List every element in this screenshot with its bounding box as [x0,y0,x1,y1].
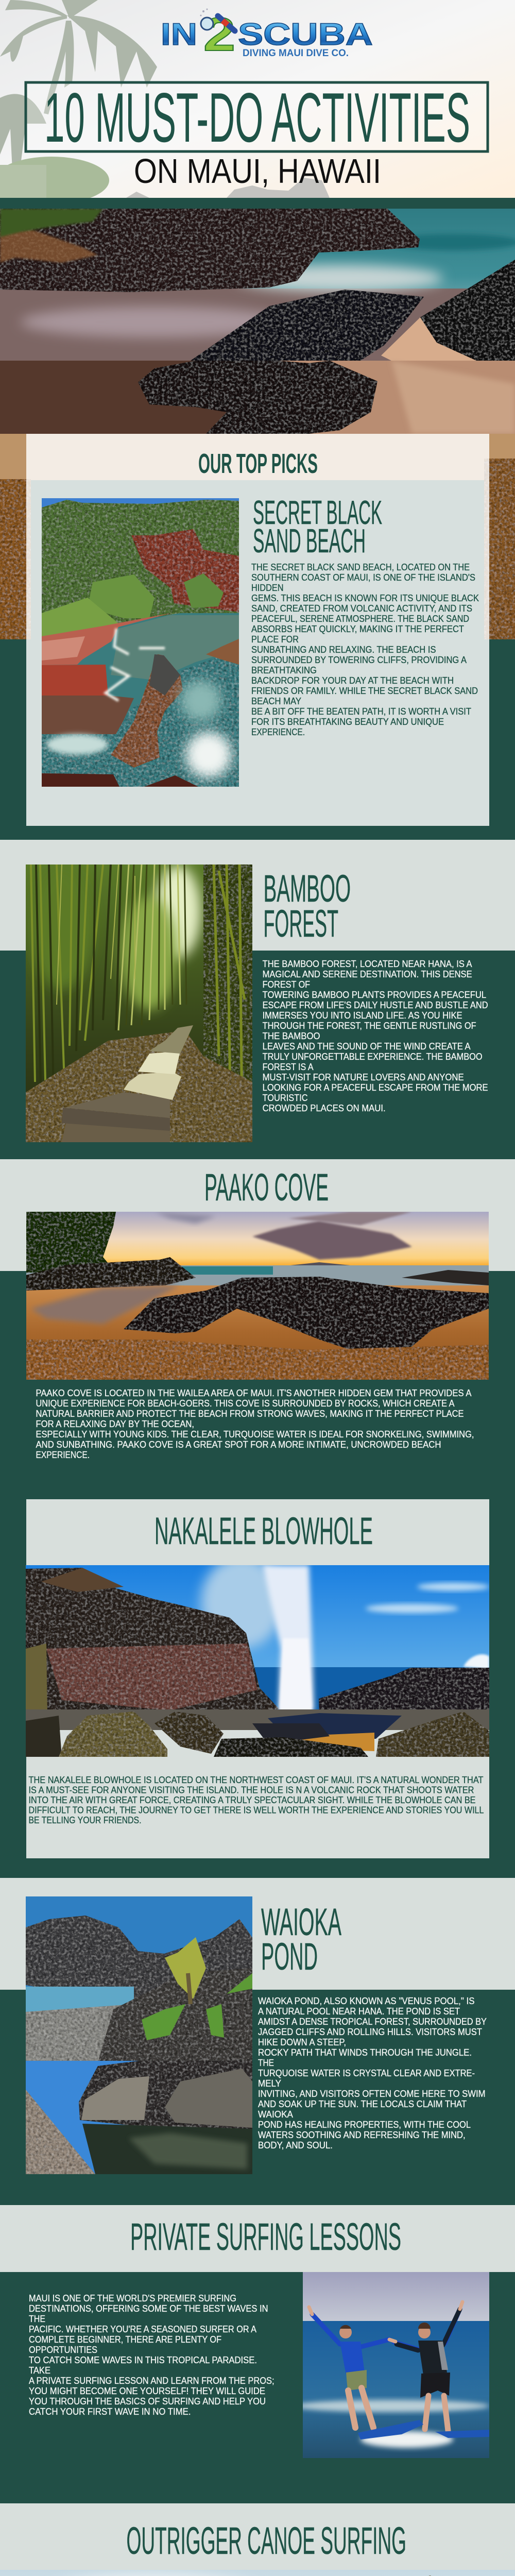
text: waioka pond description: HIKE DOWN A STEEP, [258,2037,346,2047]
heading: secret black sand beach: SECRET BLACK [253,494,382,531]
text: bamboo forest description: TOURISTIC [263,1093,308,1103]
text: bamboo forest description: TRULY UNFORGETTABLE EXPERIENCE. THE BAMBOO [263,1052,483,1062]
text: waioka pond description: ROCKY PATH THAT WINDS THROUGH THE JUNGLE. [258,2047,472,2058]
text: waioka pond description: JAGGED CLIFFS AND ROLLING HILLS. VISITORS MUST [258,2027,482,2037]
heading: bamboo forest: FOREST [264,902,338,945]
photo: nakalele blowhole [26,1556,489,1757]
text: private surfing lessons description: THE [29,2314,45,2324]
text: waioka pond description [258,1996,487,2150]
text: secret black sand beach description: SAND, CREATED FROM VOLCANIC ACTIVITY, AND ITS [251,603,472,614]
text: nakalele blowhole description: IS A MUST-SEE FOR ANYONE VISITING THE ISLAND. THE HOLE IS N A VOLCANIC ROCK THAT SHOOTS WATER [29,1785,474,1795]
text: bamboo forest description: THROUGH THE FOREST, THE GENTLE RUSTLING OF [263,1021,476,1031]
text: private surfing lessons description: YOU MIGHT BECOME ONE YOURSELF! THEY WILL GUIDE [29,2386,265,2396]
text: private surfing lessons description: TAKE [29,2365,50,2376]
photo: red sand beach [42,498,239,787]
heading: our top picks: OUR TOP PICKS [198,448,318,479]
section: outrigger canoe surfing [0,2503,515,2576]
text: secret black sand beach description: FOR ITS BREATHTAKING BEAUTY AND UNIQUE [251,717,444,727]
text: secret black sand beach description: GEMS. THIS BEACH IS KNOWN FOR ITS UNIQUE BLACK [251,593,479,603]
heading: bamboo forest [264,867,351,945]
text: waioka pond description: WAIOKA [258,2109,293,2120]
text: secret black sand beach description: THE SECRET BLACK SAND BEACH, LOCATED ON THE [251,562,470,572]
text: secret black sand beach description: PLACE FOR [251,634,299,645]
text: secret black sand beach description: SURROUNDED BY TOWERING CLIFFS, PROVIDING A [251,655,467,665]
text: bamboo forest description: FOREST IS A [263,1062,314,1072]
hero: green divider band [0,198,515,209]
text: waioka pond description: THE [258,2058,274,2068]
photo: outrigger canoe [0,2570,515,2576]
logo: In2Scuba: 2 [203,8,235,61]
text: paako cove description: EXPERIENCE. [36,1450,90,1460]
text: secret black sand beach description [251,562,479,737]
text: paako cove description: ESPECIALLY WITH YOUNG KIDS. THE CLEAR, TURQUOISE WATER IS IDEAL FOR SNORKELING, SWIMMING, [36,1429,474,1439]
text: bamboo forest description: MAGICAL AND SERENE DESTINATION. THIS DENSE [263,969,472,979]
text: bamboo forest description: MUST-VISIT FOR NATURE LOVERS AND ANYONE [263,1072,464,1082]
text: bamboo forest description: THE BAMBOO [263,1031,320,1041]
text: nakalele blowhole description [29,1775,484,1825]
text: secret black sand beach description: BEACH MAY [251,696,301,706]
text: waioka pond description: AND SOAK UP THE SUN. THE LOCALS CLAIM THAT [258,2099,467,2109]
photo: surfers [294,2272,489,2458]
text: private surfing lessons description: COMPLETE BEGINNER, THERE ARE PLENTY OF [29,2334,221,2345]
heading: bamboo forest: BAMBOO [264,867,351,910]
text: nakalele blowhole description: BE TELLING YOUR FRIENDS. [29,1815,141,1825]
text: bamboo forest description: LEAVES AND THE SOUND OF THE WIND CREATE A [263,1041,471,1052]
text: waioka pond description: A NATURAL POOL NEAR HANA. THE POND IS SET [258,2006,460,2016]
text: secret black sand beach description: BE A BIT OFF THE BEATEN PATH, IT IS WORTH A VISIT [251,706,471,717]
logo: In2Scuba: IN [161,17,197,52]
text: bamboo forest description [263,959,488,1113]
text: private surfing lessons description [29,2293,274,2417]
heading: waioka pond: WAIOKA [261,1901,341,1943]
subtitle: ON MAUI, HAWAII [134,152,381,191]
text: private surfing lessons description: YOU THROUGH THE BASICS OF SURFING AND HELP YOU [29,2396,266,2406]
text: waioka pond description: BODY, AND SOUL. [258,2140,333,2150]
text: waioka pond description: WATERS SOOTHING AND REFRESHING THE MIND, [258,2130,466,2140]
section: paako cove [0,1159,515,1460]
text: paako cove description: NATURAL BARRIER AND PROTECT THE BEACH FROM STRONG WAVES, MAKING IT THE PERFECT PLACE [36,1409,464,1419]
text: waioka pond description: TURQUOISE WATER IS CRYSTAL CLEAR AND EXTRE- [258,2068,475,2078]
text: secret black sand beach description: HIDDEN [251,583,283,593]
heading: waioka pond: POND [261,1935,318,1978]
text: bamboo forest description: LOOKING FOR A PEACEFUL ESCAPE FROM THE MORE [263,1082,488,1093]
text: bamboo forest description: CROWDED PLACES ON MAUI. [263,1103,386,1113]
heading: secret black sand beach: SAND BEACH [253,522,366,560]
text: private surfing lessons description: DESTINATIONS, OFFERING SOME OF THE BEST WAVES IN [29,2303,268,2314]
text: paako cove description [36,1388,474,1460]
photo: bamboo forest [26,865,252,1142]
text: private surfing lessons description: OPPORTUNITIES [29,2345,97,2355]
heading: waioka pond [261,1901,341,1978]
text: waioka pond description: INVITING, AND VISITORS OFTEN COME HERE TO SWIM [258,2089,485,2099]
text: private surfing lessons description: PACIFIC. WHETHER YOU'RE A SEASONED SURFER OR A [29,2324,256,2334]
section: private surfing lessons [0,2205,515,2458]
text: waioka pond description: AMIDST A DENSE TROPICAL FOREST, SURROUNDED BY [258,2016,487,2027]
heading: paako cove: PAAKO COVE [204,1166,329,1209]
text: bamboo forest description: FOREST OF [263,979,310,990]
text: secret black sand beach description: EXPERIENCE. [251,727,305,737]
heading: secret black sand beach [253,494,382,560]
text: waioka pond description: MELY [258,2078,281,2089]
text: secret black sand beach description: BACKDROP FOR YOUR DAY AT THE BEACH WITH [251,675,454,686]
text: nakalele blowhole description: THE NAKALELE BLOWHOLE IS LOCATED ON THE NORTHWEST COAST OF MAUI. IT'S A NATURAL WONDER THAT [29,1775,484,1785]
panel: nakalele blowhole [26,1499,489,1858]
text: nakalele blowhole description: INTO THE AIR WITH GREAT FORCE, CREATING A TRULY SPECTACULAR SIGHT. WHILE THE BLOWHOLE CAN BE [29,1795,476,1805]
text: paako cove description: PAAKO COVE IS LOCATED IN THE WAILEA AREA OF MAUI. IT'S ANOTHER HIDDEN GEM THAT PROVIDES A [36,1388,472,1398]
text: paako cove description: FOR A RELAXING DAY BY THE OCEAN, [36,1419,194,1429]
text: bamboo forest description: TOWERING BAMBOO PLANTS PROVIDES A PEACEFUL [263,990,486,1000]
text: secret black sand beach description: FRIENDS OR FAMILY. WHILE THE SECRET BLACK SAND [251,686,478,696]
logo: In2Scuba: DIVING MAUI DIVE CO. [243,47,349,59]
text: secret black sand beach description: SOUTHERN COAST OF MAUI, IS ONE OF THE ISLAND'S [251,572,475,583]
hero: beach photo background [0,0,515,639]
text: secret black sand beach description: BREATHTAKING [251,665,317,675]
panel: our top picks and secret black sand beach [26,434,489,826]
text: secret black sand beach description: ABSORBS HEAT QUICKLY, MAKING IT THE PERFECT [251,624,464,634]
text: bamboo forest description: ESCAPE FROM LIFE'S DAILY HUSTLE AND BUSTLE AND [263,1000,488,1010]
photo: waioka pond [26,1896,252,2174]
text: bamboo forest description: THE BAMBOO FOREST, LOCATED NEAR HANA, IS A [263,959,472,969]
text: secret black sand beach description: PEACEFUL, SERENE ATMOSPHERE. THE BLACK SAND [251,614,469,624]
text: bamboo forest description: IMMERSES YOU INTO ISLAND LIFE. AS YOU HIKE [263,1010,462,1021]
text: paako cove description: UNIQUE EXPERIENCE FOR BEACH-GOERS. THIS COVE IS SURROUNDED BY ROCKS, WHICH CREATE A [36,1398,454,1409]
text: private surfing lessons description: TO CATCH SOME WAVES IN THIS TROPICAL PARADISE. [29,2355,257,2365]
text: waioka pond description: WAIOKA POND, ALSO KNOWN AS "VENUS POOL," IS [258,1996,475,2006]
text: waioka pond description: POND HAS HEALING PROPERTIES, WITH THE COOL [258,2120,471,2130]
logo: In2Scuba [161,8,373,61]
section: waioka pond [0,1878,515,2174]
text: private surfing lessons description: CATCH YOUR FIRST WAVE IN NO TIME. [29,2406,191,2417]
text: private surfing lessons description: A PRIVATE SURFING LESSON AND LEARN FROM THE PROS; [29,2376,274,2386]
photo: paako cove sunset [26,1212,489,1380]
text: paako cove description: AND SUNBATHING. PAAKO COVE IS A GREAT SPOT FOR A MORE INTIMATE, UNCROWDED BEACH [36,1439,441,1450]
section: bamboo forest [0,840,515,1142]
text: secret black sand beach description: SUNBATHING AND RELAXING. THE BEACH IS [251,645,436,655]
logo: In2Scuba: SCUBA [238,17,373,52]
text: private surfing lessons description: MAUI IS ONE OF THE WORLD'S PREMIER SURFING [29,2293,236,2303]
